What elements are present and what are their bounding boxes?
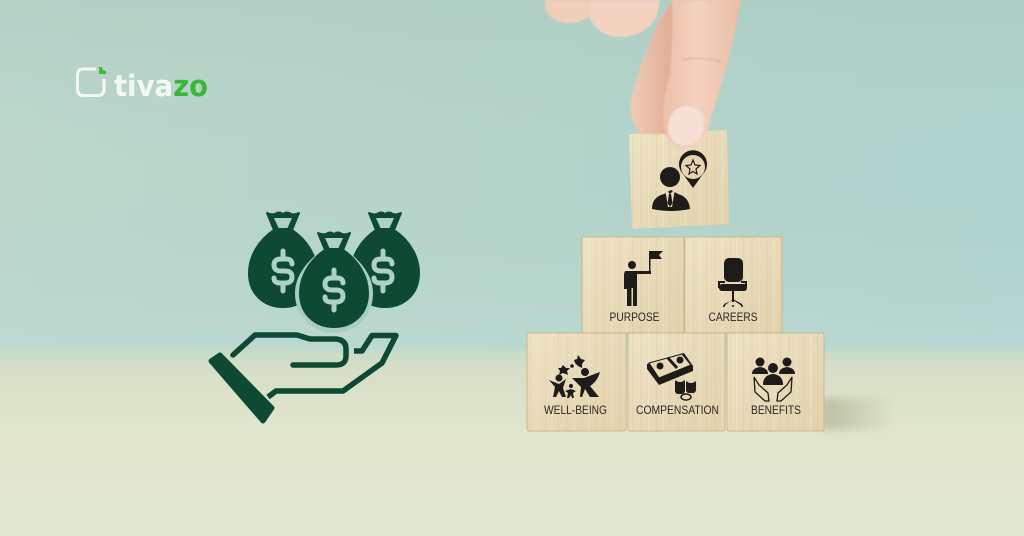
block: benefits xyxy=(727,333,824,431)
label: CAREERS xyxy=(708,310,758,324)
icon: left money bag xyxy=(249,212,317,307)
table surface xyxy=(0,350,1024,536)
middle finger behind xyxy=(630,0,695,134)
icon: office chair xyxy=(718,258,747,307)
block: careers xyxy=(685,237,782,333)
logo wordmark: tivazo xyxy=(114,69,208,103)
icon: person with flag xyxy=(624,251,663,306)
logo icon xyxy=(78,67,106,96)
block: well-being xyxy=(527,333,626,431)
logo xyxy=(78,67,208,103)
second finger xyxy=(590,0,660,37)
icon: money bags over open hand xyxy=(211,212,419,421)
block: purpose xyxy=(582,237,684,333)
back finger xyxy=(545,0,592,23)
label: WELL-BEING xyxy=(544,403,607,417)
icon: centre money bag xyxy=(295,232,373,333)
finger crease xyxy=(682,58,722,62)
icon: person with star badge xyxy=(652,150,707,211)
icon: people cupped in hands xyxy=(752,358,795,401)
front finger xyxy=(663,0,741,148)
label: COMPENSATION xyxy=(636,403,719,417)
block: compensation xyxy=(628,333,725,431)
label: PURPOSE xyxy=(610,310,660,324)
icon: family with stars xyxy=(549,355,600,398)
icon: right money bag xyxy=(351,212,419,307)
background wall xyxy=(0,0,1024,360)
icon: open hand xyxy=(211,335,396,421)
hand holding block xyxy=(545,0,741,148)
block shadow xyxy=(822,398,894,430)
top block: recognition xyxy=(629,130,729,229)
label: BENEFITS xyxy=(751,403,801,417)
icon: banknotes and coins xyxy=(647,353,696,400)
fingernail xyxy=(668,106,704,146)
